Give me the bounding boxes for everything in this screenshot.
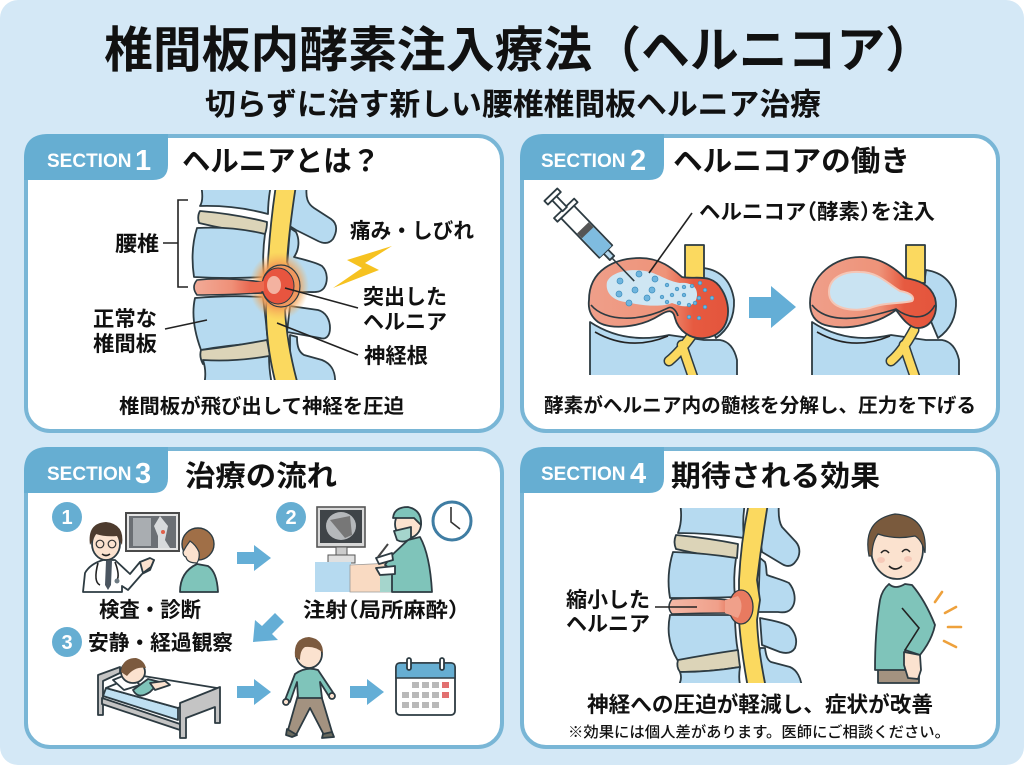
section 3 tab [24,447,168,493]
label: reduced hernia: ヘルニア [566,613,650,636]
label: step 1: 検査・診断 [99,599,201,622]
section 2 tab: 2 [630,145,646,177]
panel: section 4 [520,447,998,747]
section 3 tab: SECTION [47,464,131,485]
spine illustration [193,185,336,385]
section 2 tab [520,134,664,180]
label: normal disc: 正常な [93,308,157,331]
step 3 badge [52,627,82,657]
icon: syringe [541,185,644,291]
note: disclaimer: ※効果には個人差があります。医師にご相談ください。 [568,723,950,741]
illustration: disc before [589,245,737,380]
step 1 badge [52,502,82,532]
section 1 tab [24,134,168,180]
arrow: step 3 to walking [237,679,271,705]
heading: section 1: ヘルニアとは？ [182,146,380,178]
section 1 tab: 1 [135,145,151,177]
label: nerve root: 神経根 [364,345,428,368]
section 1 tab: SECTION [47,151,131,172]
icon: calendar [396,658,455,715]
icon: clock [433,502,471,540]
icon: relief rays [935,592,961,647]
label: reduced hernia: 縮小した [566,589,650,612]
panel: section 2 [520,134,998,431]
subtitle: 切らずに治す新しい腰椎椎間板ヘルニア治療 [205,88,821,122]
label: inject: ヘルニコア（酵素）を注入 [699,201,935,224]
step 3 badge: 3 [61,632,73,654]
label: pain: 痛み・しびれ [350,220,474,243]
panel: section 3 [24,447,502,747]
label: lumbar: 腰椎 [115,233,159,256]
arrow: before to after [749,286,796,328]
label: normal disc: 椎間板 [93,333,157,356]
icon: lightning [333,246,392,288]
label: hernia: ヘルニア [363,311,447,334]
caption: section 1: 椎間板が飛び出して神経を圧迫 [119,394,404,418]
label: step 3: 安静・経過観察 [88,632,233,655]
title: 椎間板内酵素注入療法（ヘルニコア） [104,24,934,78]
caption: section 4: 神経への圧迫が軽減し、症状が改善 [587,692,933,717]
bracket: lumbar [163,200,188,287]
step 1 badge: 1 [61,507,73,529]
step 1 illustration: patient [180,528,218,592]
label: nerve root [277,323,428,368]
section 4 tab [520,447,664,493]
step illustration: walking person [283,637,335,738]
section 4 tab: SECTION [541,464,625,485]
step 2 badge [276,502,306,532]
section 3 tab: 3 [135,458,151,490]
spine illustration: reduced hernia [669,503,802,688]
heading: section 4: 期待される効果 [671,460,880,493]
label: step 2: 注射（局所麻酔 ） [303,599,459,622]
step 2 illustration: monitor [317,507,365,563]
section 4 tab: 4 [630,458,646,490]
label: hernia: 突出した [363,286,447,309]
arrow: step 2 to 3 [253,613,284,642]
caption: section 2: 酵素がヘルニア内の髄核を分解し、圧力を下げる [544,394,976,417]
arrow: step 1 to 2 [237,545,271,571]
label: hernia [285,286,447,334]
section 2 tab: SECTION [541,151,625,172]
illustration: smiling man [868,514,935,683]
heading: section 2: ヘルニコアの働き [673,145,910,178]
label: inject [649,201,935,273]
label: normal disc [93,308,207,356]
heading: section 3: 治療の流れ [185,460,337,493]
panel: section 1 [24,134,502,431]
step 1 illustration: consultation [83,513,179,592]
illustration: disc after [810,245,959,380]
label: reduced hernia [566,589,697,636]
arrow: walking to calendar [350,679,384,705]
step 2 badge: 2 [285,507,297,529]
step 3 illustration: bed [98,658,220,738]
step 2 illustration: injection [315,507,432,592]
